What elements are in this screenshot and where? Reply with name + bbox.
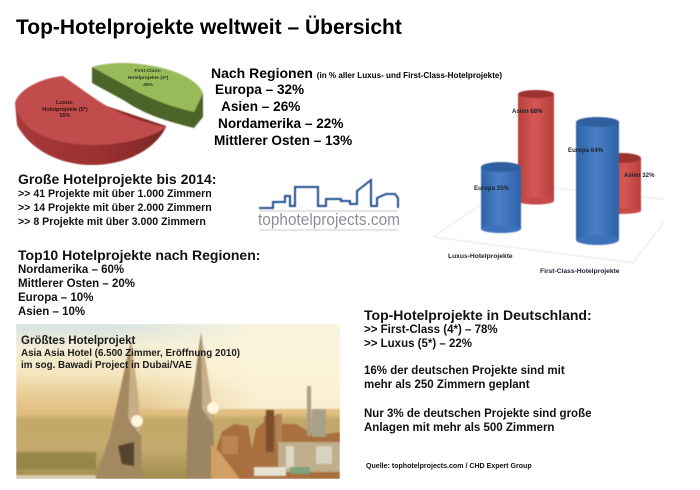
regions heading and list: Nordamerika – 22% (218, 116, 343, 131)
top10 regions text block: Top10 Hotelprojekte nach Regionen: (18, 247, 260, 263)
large projects text block: >> 8 Projekte mit über 3.000 Zimmern (18, 216, 206, 228)
large projects text block (18, 171, 216, 228)
Germany text block: Anlagen mit mehr als 500 Zimmern (364, 422, 554, 434)
regions heading and list: Europa – 32% (215, 82, 304, 97)
top10 regions text block: Nordamerika – 60% (18, 264, 124, 276)
Germany text block: >> First-Class (4*) – 78% (364, 324, 498, 336)
Germany text block: Nur 3% de deutschen Projekte sind große (364, 408, 592, 420)
Germany text block (364, 307, 592, 434)
top10 regions text block: Mittlerer Osten – 20% (18, 278, 135, 290)
large projects text block: Große Hotelprojekte bis 2014: (18, 171, 216, 187)
pie label: luxury (42, 100, 88, 119)
bar labels (448, 108, 654, 275)
photo caption: Asia Asia Hotel (6.500 Zimmer, Eröffnung 2010) (21, 348, 240, 359)
regions heading and list: Mittlerer Osten – 13% (214, 133, 352, 148)
regions heading and list: Nach Regionen (in % aller Luxus- und First-Class-Hotelprojekte) (211, 65, 502, 81)
large projects text block: >> 41 Projekte mit über 1.000 Zimmern (18, 188, 212, 200)
pie label: luxury: Luxus- (56, 100, 74, 106)
Germany text block: 16% der deutschen Projekte sind mit (364, 365, 565, 377)
regions heading and list: Asien – 26% (221, 99, 300, 114)
bar labels: Europa 64% (568, 147, 603, 154)
photo caption (21, 335, 240, 371)
photo panel: Dubai towers (16, 324, 340, 479)
pie label: first class: First-Class- (135, 69, 161, 74)
pie label: first class: Hotelprojekte (4*) (128, 76, 168, 81)
bar labels: First-Class-Hotelprojekte (540, 268, 620, 275)
pie label: luxury: Hotelprojekte (5*) (42, 106, 88, 112)
top10 regions text block: Europa – 10% (18, 292, 93, 304)
large projects text block: >> 14 Projekte mit über 2.000 Zimmern (18, 202, 212, 214)
top10 regions text block (18, 247, 260, 318)
regions heading and list (211, 65, 502, 148)
pie label: first class: 45% (143, 83, 153, 88)
bar chart: 3D cylinders (433, 90, 664, 263)
logo skyline (259, 180, 398, 230)
source: Quelle: tophotelprojects.com / CHD Expert Group (366, 463, 532, 470)
Germany text block: >> Luxus (5*) – 22% (364, 338, 472, 350)
top10 regions text block: Asien – 10% (18, 306, 85, 318)
pie label: first class (128, 68, 168, 88)
Germany text block: Top-Hotelprojekte in Deutschland: (364, 307, 592, 323)
photo caption: im sog. Bawadi Project in Dubai/VAE (21, 360, 192, 371)
pie label: luxury: 55% (59, 113, 70, 119)
logo wordmark: tophotelprojects.com (258, 210, 400, 229)
bar labels: Asien 68% (512, 108, 542, 115)
Germany text block: mehr als 250 Zimmern geplant (364, 379, 530, 391)
title: Top-Hotelprojekte weltweit – Übersicht (16, 16, 402, 39)
bar labels: Europa 35% (474, 185, 509, 192)
bar labels: Asien 32% (624, 172, 654, 179)
bar labels: Luxus-Hotelprojekte (448, 253, 513, 260)
photo caption: Größtes Hotelprojekt (21, 335, 135, 347)
